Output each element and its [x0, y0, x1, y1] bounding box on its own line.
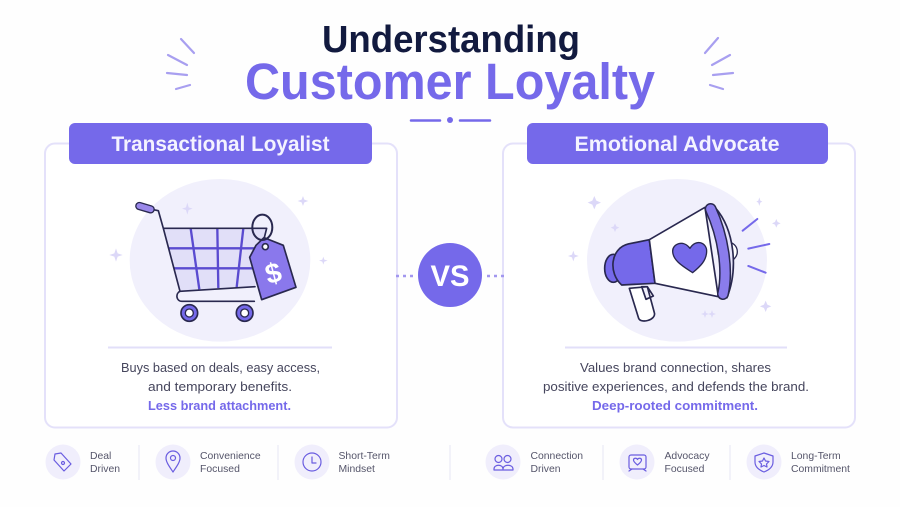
trait: advocacy focused: Advocacy [664, 451, 710, 462]
panel: transactional loyalist [45, 123, 397, 428]
description: and temporary benefits. [148, 379, 292, 394]
trait row [46, 444, 850, 480]
left accent rays [167, 39, 194, 89]
trait: connection driven: Connection [530, 451, 583, 462]
trait: advocacy focused [620, 444, 710, 480]
icon: shopping cart with price tag [109, 179, 328, 342]
trait: long-term commitment [746, 444, 850, 480]
dotted connectors [396, 275, 506, 277]
description [121, 360, 320, 413]
panel heading [69, 123, 372, 164]
right accent rays [705, 38, 733, 89]
panel heading [527, 123, 828, 164]
title [245, 19, 656, 110]
trait: advocacy focused: Focused [664, 464, 705, 475]
trait: connection driven [486, 444, 583, 480]
trait: long-term commitment: Long-Term [791, 451, 841, 462]
description: Less brand attachment. [148, 398, 291, 413]
trait: connection driven: Driven [530, 464, 561, 475]
panel heading: Emotional Advocate [574, 133, 780, 156]
trait: convenience focused: Focused [200, 464, 240, 475]
vs badge [418, 243, 482, 307]
divider [565, 346, 787, 348]
vs label: VS [430, 260, 470, 293]
description: positive experiences, and defends the brand. [543, 379, 809, 394]
description [543, 360, 809, 413]
panel frame [45, 144, 397, 428]
trait: convenience focused [156, 444, 261, 480]
trait: deal driven: Driven [90, 464, 120, 475]
description: Deep-rooted commitment. [592, 398, 758, 413]
trait: deal driven [46, 444, 120, 480]
trait: long-term commitment: Commitment [791, 464, 850, 475]
icon: shopping cart with price tag: $ [262, 256, 285, 290]
title underline ornament [411, 117, 490, 123]
divider [108, 346, 332, 348]
panel frame [503, 144, 855, 428]
title line 1: Understanding [322, 19, 580, 61]
vs connector [396, 243, 506, 307]
trait: short-term mindset [294, 444, 390, 480]
panel heading: Transactional Loyalist [112, 133, 330, 156]
trait: short-term mindset: Mindset [338, 464, 375, 475]
trait: deal driven: Deal [90, 451, 111, 462]
icon: megaphone with heart [568, 179, 781, 342]
trait: short-term mindset: Short-Term [338, 451, 390, 462]
description: Buys based on deals, easy access, [121, 360, 320, 375]
trait: convenience focused: Convenience [200, 451, 261, 462]
panel: emotional advocate [503, 123, 855, 428]
trait separators [139, 445, 730, 480]
title line 2: Customer Loyalty [245, 53, 656, 110]
description: Values brand connection, shares [580, 360, 771, 375]
